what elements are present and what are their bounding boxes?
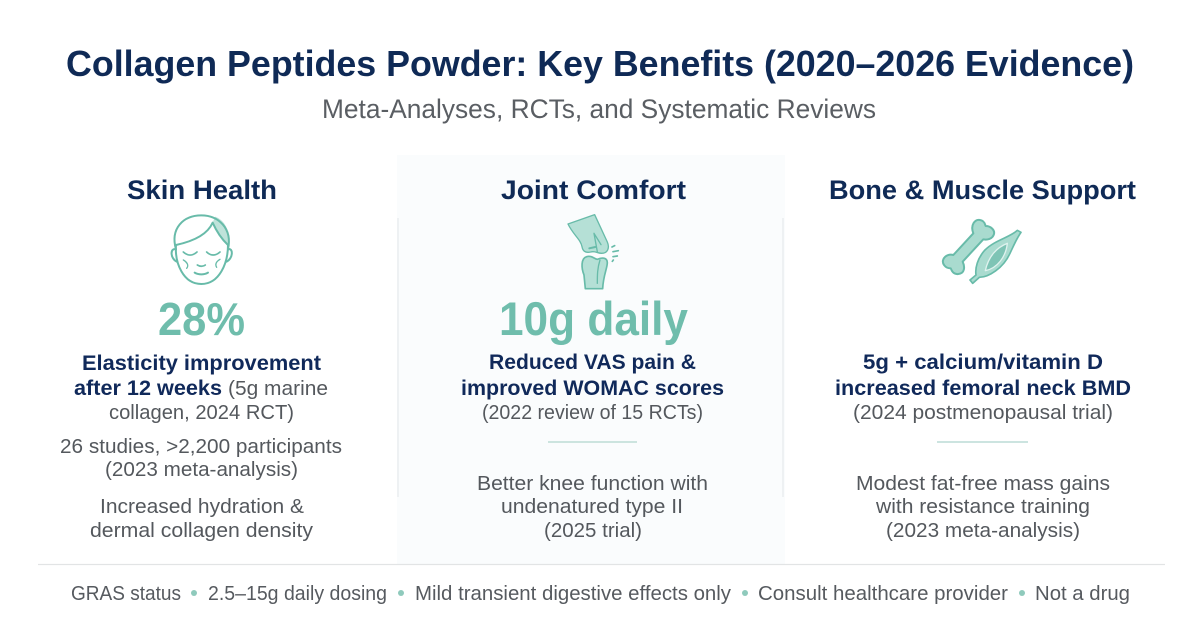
finding: elasticity: Elasticity improvement: [82, 352, 321, 375]
footer notes: Mild transient digestive effects only: [415, 583, 731, 605]
panel: joint comfort: [461, 175, 724, 542]
finding: elasticity: (5g marine: [228, 378, 328, 400]
finding: elasticity: [74, 352, 328, 424]
finding: femoral neck BMD: (2024 postmenopausal trial): [853, 402, 1113, 424]
finding: VAS and WOMAC: Reduced VAS pain &: [489, 351, 696, 374]
text: fat-free mass: with resistance training: [875, 496, 1090, 518]
icon: knee: [568, 215, 618, 289]
text: knee function: undenatured type II: [501, 496, 683, 518]
text: meta-analysis: 26 studies, >2,200 participants: [60, 436, 342, 458]
text: hydration: dermal collagen density: [90, 520, 313, 542]
footer notes: 2.5–15g daily dosing: [208, 583, 387, 605]
footer notes: [71, 583, 1130, 605]
text: meta-analysis: [60, 436, 342, 481]
finding: elasticity: after 12 weeks: [74, 377, 222, 400]
icon: bone and muscle: [943, 220, 1021, 283]
title: Collagen Peptides Powder: Key Benefits (2020–2026 Evidence): [66, 43, 1134, 84]
finding: elasticity: collagen, 2024 RCT): [109, 402, 294, 424]
finding: femoral neck BMD: 5g + calcium/vitamin D: [863, 351, 1103, 374]
heading: skin health: Skin Health: [127, 175, 277, 205]
text: knee function: (2025 trial): [544, 520, 642, 542]
heading: bone and muscle support: Bone & Muscle Support: [829, 175, 1136, 205]
footer notes: GRAS status: [71, 583, 181, 605]
footer notes: Consult healthcare provider: [758, 583, 1008, 605]
panel: bone and muscle support: [829, 175, 1136, 542]
heading: joint comfort: Joint Comfort: [501, 175, 686, 205]
text: meta-analysis: (2023 meta-analysis): [105, 459, 298, 481]
panel: skin health: [60, 175, 342, 542]
panel: joint comfort background: [397, 155, 785, 564]
text: knee function: Better knee function with: [477, 473, 708, 495]
text: fat-free mass: Modest fat-free mass gains: [856, 473, 1110, 495]
finding: femoral neck BMD: increased femoral neck BMD: [835, 377, 1131, 400]
stat: 28%: 28%: [158, 293, 245, 345]
text: fat-free mass: [856, 473, 1110, 542]
text: hydration: Increased hydration &: [100, 496, 305, 518]
finding: VAS and WOMAC: improved WOMAC scores: [461, 377, 724, 400]
footer notes: Not a drug: [1035, 583, 1130, 605]
finding: femoral neck BMD: [835, 351, 1131, 424]
finding: VAS and WOMAC: [461, 351, 724, 424]
text: knee function: [477, 473, 708, 542]
text: hydration: [90, 496, 313, 542]
finding: VAS and WOMAC: (2022 review of 15 RCTs): [482, 402, 703, 424]
text: fat-free mass: (2023 meta-analysis): [886, 520, 1080, 542]
subtitle: Meta-Analyses, RCTs, and Systematic Reviews: [322, 94, 876, 124]
stat: 10g daily: 10g daily: [499, 292, 688, 345]
icon: face: [172, 215, 232, 284]
